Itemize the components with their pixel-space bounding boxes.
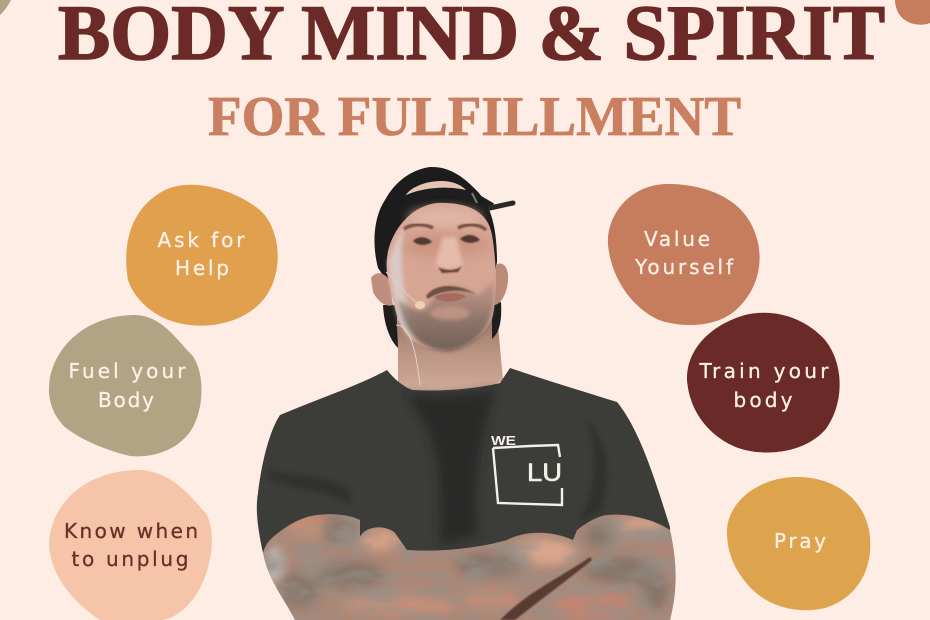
face (387, 203, 496, 350)
blob: Fuel your Body: Body (98, 388, 154, 412)
blob: Fuel your Body (49, 315, 202, 456)
logo text LU: LU (527, 459, 562, 487)
mouth (434, 293, 466, 302)
beard (398, 280, 494, 351)
arm fold shadow (500, 557, 592, 620)
face shading left (388, 226, 416, 342)
blob: Ask for Help: Ask for (158, 228, 245, 252)
eye area blush (402, 233, 490, 257)
blob: Ask for Help (126, 185, 278, 326)
skin highlights (267, 516, 665, 619)
cap strap (405, 192, 492, 207)
neck (398, 315, 503, 397)
blob: Value Yourself (608, 184, 760, 325)
cap (374, 167, 497, 300)
logo box (493, 445, 562, 505)
microphone (386, 272, 420, 385)
cap buckle (472, 193, 477, 203)
blob: Train your body: Train your (698, 359, 829, 383)
tattoo texture (264, 515, 676, 620)
blob: Fuel your Body: Fuel your (68, 359, 186, 383)
nose (436, 236, 463, 269)
eyes (413, 235, 480, 245)
blob: Value Yourself: Value (644, 227, 710, 251)
corner shape: olive (0, 0, 11, 15)
subtitle: FOR FULFILLMENT (208, 86, 741, 148)
tattoo patches (280, 516, 669, 610)
hair behind ears (383, 302, 501, 348)
blob: Know when to unplug: Know when (64, 519, 198, 543)
arm base (263, 514, 676, 620)
blob: Value Yourself: Yourself (634, 255, 734, 279)
ears (371, 273, 393, 306)
blob: Pray: Pray (774, 529, 826, 553)
moustache (426, 286, 476, 299)
tattooed arms (263, 514, 676, 620)
blob: Pray (727, 477, 870, 610)
blob: Know when to unplug (49, 470, 212, 620)
blob: Train your body: body (734, 388, 793, 412)
eyebrows (404, 225, 486, 230)
blob: Ask for Help: Help (175, 256, 229, 280)
shirt shadows (405, 388, 495, 545)
blob: Train your body (687, 313, 840, 453)
forehead gap (405, 181, 466, 197)
forehead light (409, 208, 481, 228)
t-shirt (257, 368, 670, 570)
chin patch (430, 306, 470, 320)
corner shape: terracotta (895, 0, 930, 25)
logo text WE: WE (491, 433, 516, 448)
shirt logo (491, 433, 562, 505)
photo: man with crossed arms (255, 167, 685, 620)
blob: Know when to unplug: to unplug (72, 547, 188, 571)
